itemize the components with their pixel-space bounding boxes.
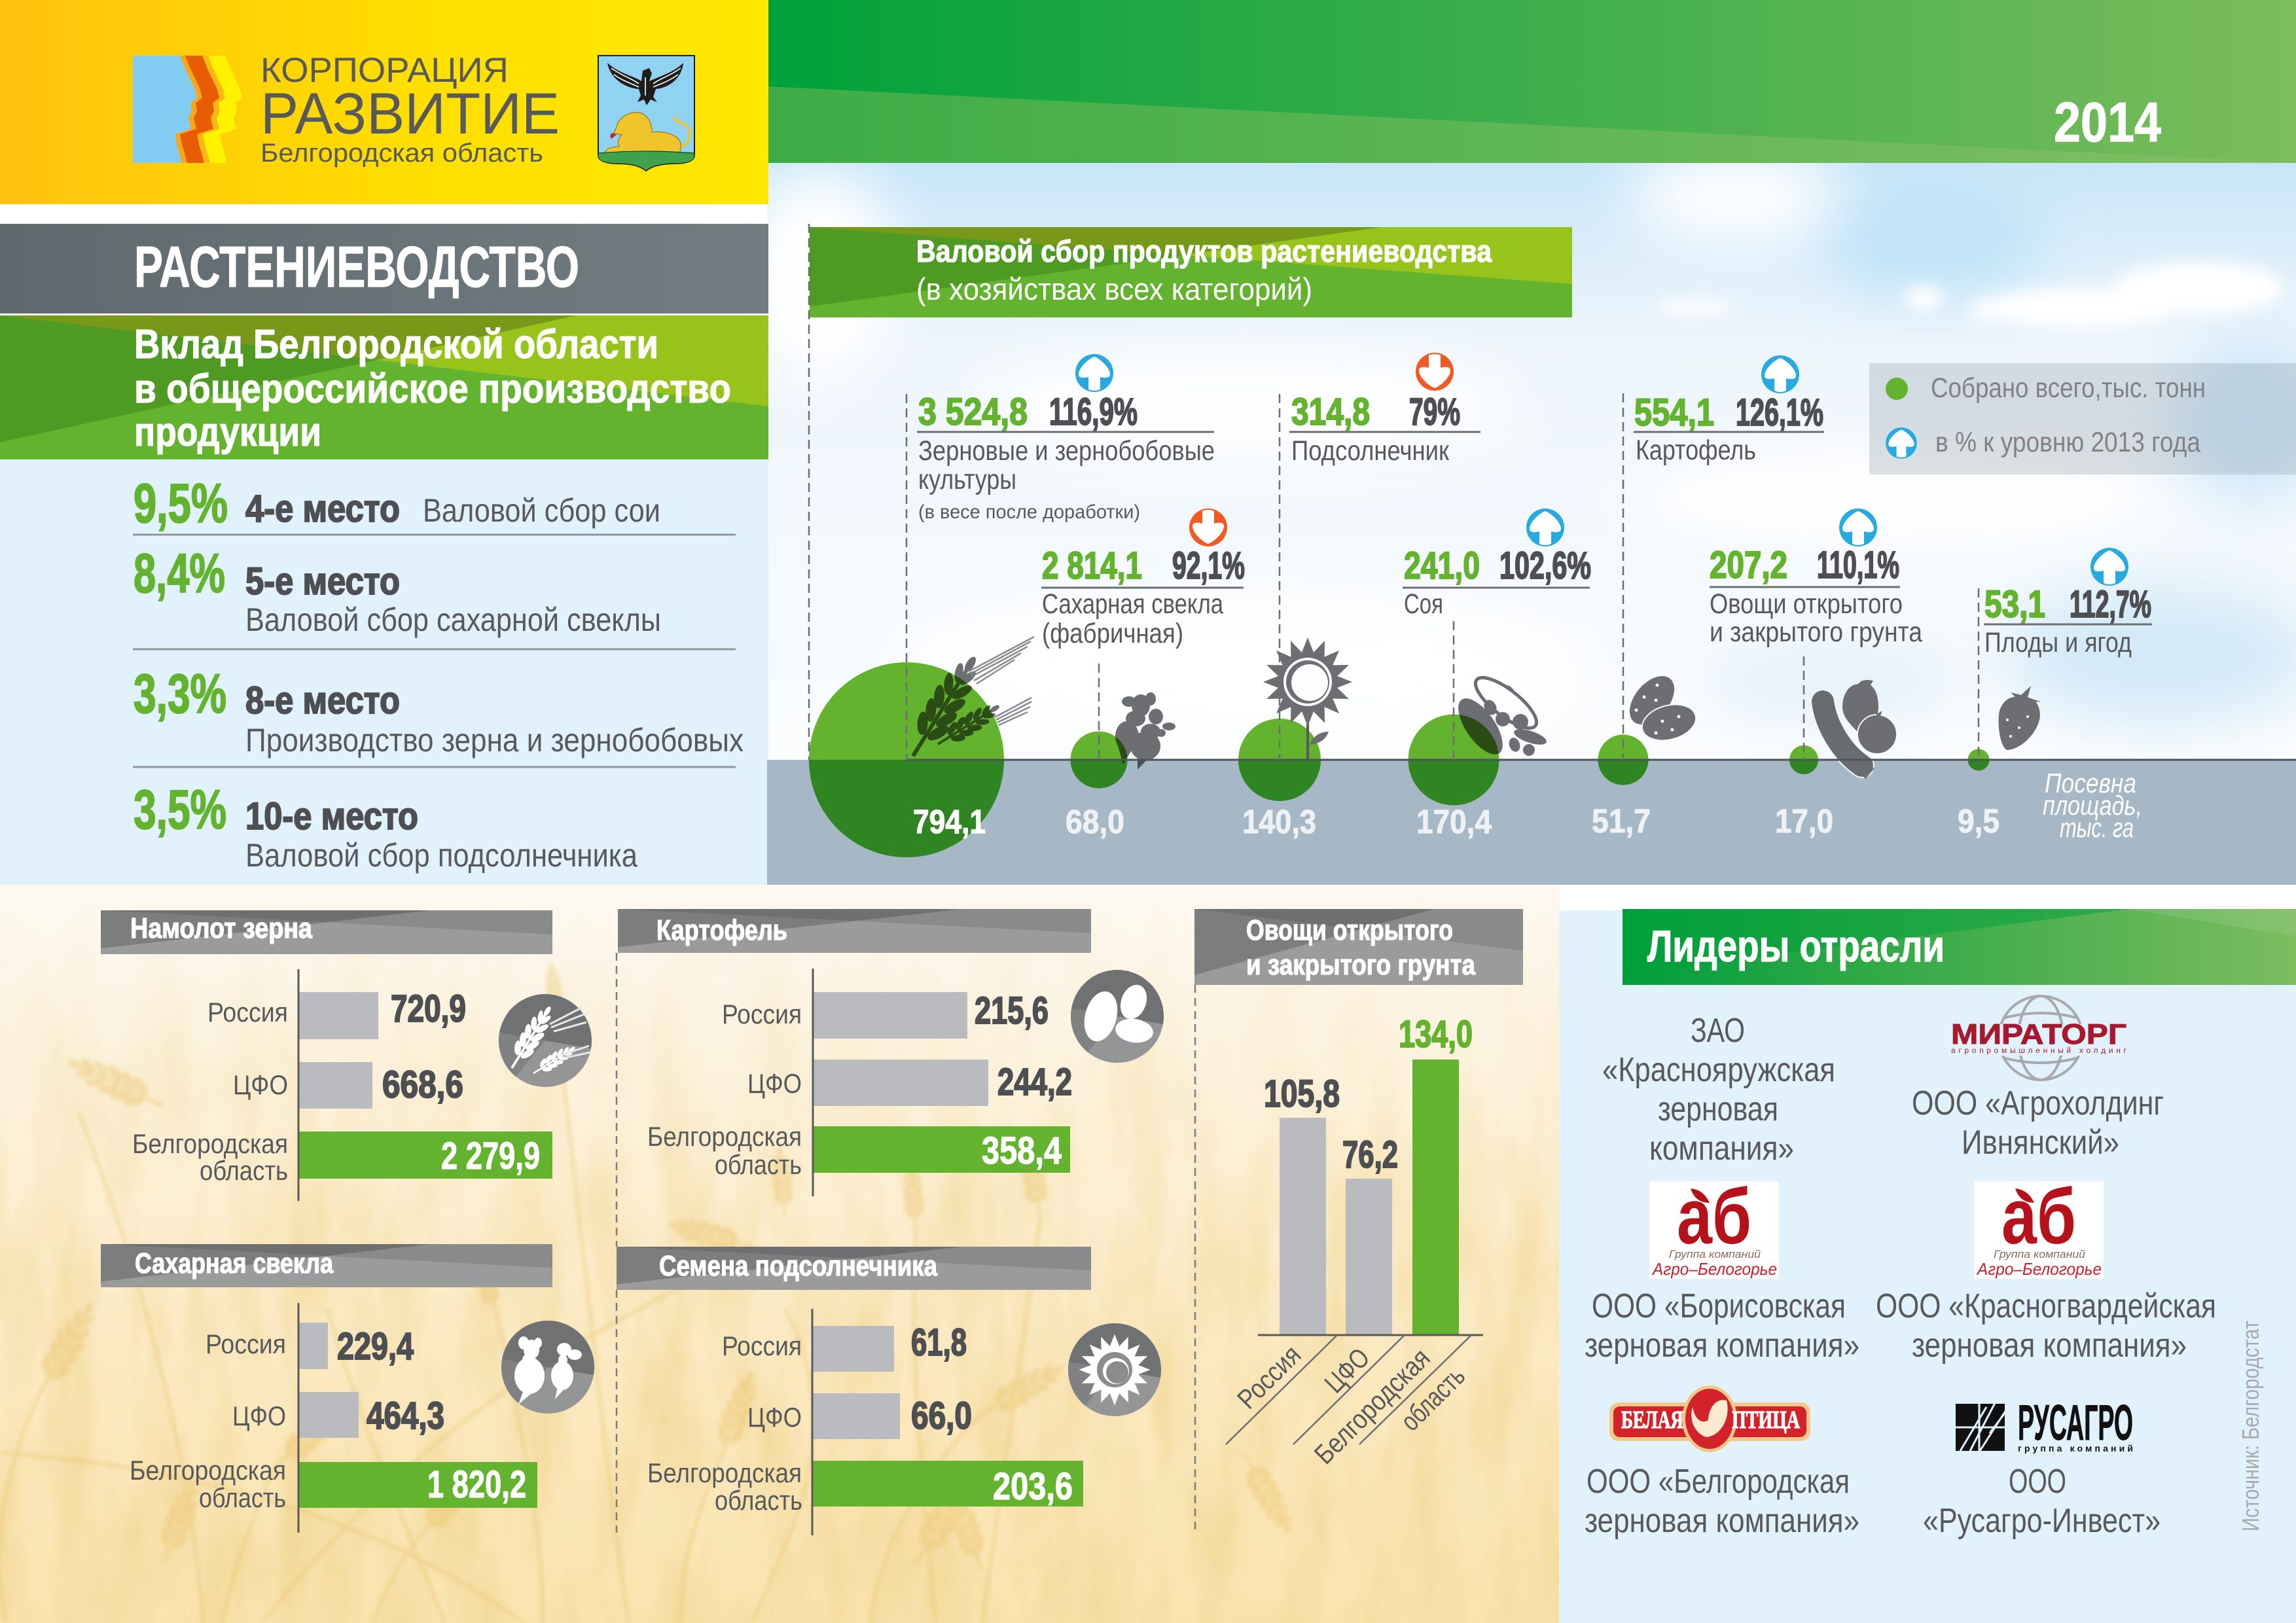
company: Rusagro-Invest: ООО xyxy=(2009,1463,2066,1501)
logo: Miratorg: МИРАТОРГ xyxy=(1951,1018,2126,1050)
bubbles: sown area xyxy=(809,662,1990,857)
values: 358,4 xyxy=(982,1130,1062,1172)
values: 1 820,2 xyxy=(427,1463,526,1506)
data: grain xyxy=(917,354,1215,523)
sown area values: 140,3 xyxy=(1242,803,1316,840)
chart: grain threshing xyxy=(101,910,592,1201)
bars xyxy=(813,969,1070,1196)
data: sunflower: 79% xyxy=(1409,391,1460,433)
heading text: продукции xyxy=(134,410,321,455)
rank: sugar beet xyxy=(134,543,661,638)
data: grain: Зерновые и зернобобовые xyxy=(918,435,1215,467)
labels xyxy=(647,1330,802,1516)
data: soy: 102,6% xyxy=(1499,544,1591,587)
bars xyxy=(1226,1060,1483,1444)
values xyxy=(382,988,540,1177)
labels: Россия xyxy=(722,1330,802,1361)
data: soy: Соя xyxy=(1404,588,1443,620)
labels: Россия xyxy=(206,1329,286,1359)
company: Krasnoyaruzhskaya: ЗАО xyxy=(1691,1012,1745,1050)
ground band xyxy=(767,760,2296,885)
legend: в % к уровню 2013 года xyxy=(1935,427,2200,458)
data: grain: (в весе после доработки) xyxy=(918,501,1140,523)
rank: sugar beet: 8,4% xyxy=(134,543,225,604)
values: 105,8 xyxy=(1264,1073,1340,1115)
values: 720,9 xyxy=(391,988,466,1030)
company: Ivnyansky xyxy=(1912,1084,2164,1162)
heading xyxy=(1623,909,2296,985)
chart: sunflower seeds xyxy=(617,1247,1161,1535)
rank: sunflower: 3,5% xyxy=(134,779,226,840)
data: sunflower xyxy=(1289,353,1480,467)
sown area values: 17,0 xyxy=(1775,802,1833,840)
values xyxy=(975,990,1072,1172)
sown area values: 170,4 xyxy=(1416,803,1492,840)
data: fruit and berries: 53,1 xyxy=(1984,583,2045,626)
labels: область xyxy=(715,1149,802,1180)
panel: gross harvest chart xyxy=(767,224,2296,885)
chart heading: Валовой сбор продуктов растениеводства xyxy=(916,234,1492,268)
bars xyxy=(298,969,552,1201)
rotated labels: Россия xyxy=(1231,1339,1307,1415)
company: Krasnoyaruzhskaya: «Краснояружская xyxy=(1602,1051,1835,1089)
icon: wheat circle xyxy=(499,994,592,1087)
chart: potato xyxy=(618,909,1164,1196)
rank: grain: 8-е место xyxy=(245,679,400,722)
chart: potato: Картофель xyxy=(656,914,787,946)
values xyxy=(1264,1013,1473,1176)
chart: sugar beet xyxy=(101,1244,594,1533)
labels: ЦФО xyxy=(747,1068,802,1099)
rank: soy xyxy=(134,473,660,534)
logo: Agro-Belogorye 2 xyxy=(1974,1173,2104,1279)
company: Borisovskaya xyxy=(1585,1287,1859,1364)
heading: Лидеры отрасли xyxy=(1647,921,1945,971)
values: 66,0 xyxy=(911,1395,972,1437)
data: grain: культуры xyxy=(918,464,1016,495)
logo: Agro-Belogorye 1 xyxy=(1649,1173,1779,1279)
bars xyxy=(812,1309,1083,1535)
logo: Miratorg xyxy=(1947,996,2132,1080)
rank: soy: 9,5% xyxy=(134,473,228,534)
labels: Россия xyxy=(722,999,802,1029)
heading: plant growing: РАСТЕНИЕВОДСТВО xyxy=(134,234,579,299)
rank: grain xyxy=(134,663,744,758)
logo: Belaya Ptitsa xyxy=(1609,1385,1810,1452)
icon: beet circle xyxy=(501,1321,594,1414)
data: potato: 126,1% xyxy=(1736,391,1823,434)
data: vegetables: 110,1% xyxy=(1817,544,1899,586)
data: fruit and berries: 112,7% xyxy=(2070,583,2151,626)
company: Krasnoyaruzhskaya xyxy=(1602,1012,1835,1168)
data: sugar beet: 92,1% xyxy=(1172,544,1245,587)
data: grain: 116,9% xyxy=(1049,391,1138,433)
company: Borisovskaya: ООО «Борисовская xyxy=(1592,1287,1846,1325)
values: 61,8 xyxy=(911,1321,967,1364)
values xyxy=(911,1321,1073,1508)
logo: Agro-Belogorye 2: Агро–Белогорье xyxy=(1976,1259,2102,1279)
logo: Belaya Ptitsa: ПТИЦА xyxy=(1732,1406,1800,1434)
company: Krasnoyaruzhskaya: зерновая xyxy=(1658,1090,1778,1128)
heading text: Вклад Белгородской области xyxy=(134,322,658,367)
data: sugar beet: 2 814,1 xyxy=(1042,544,1142,587)
panel: top green band xyxy=(768,0,2296,163)
data: fruit and berries: Плоды и ягод xyxy=(1984,627,2132,658)
background: wheat field xyxy=(0,885,1560,1623)
panel: section title xyxy=(0,224,768,313)
values xyxy=(337,1325,526,1506)
values: 215,6 xyxy=(975,990,1049,1032)
data: potato: Картофель xyxy=(1636,435,1756,466)
heading text: в общероссийское производство xyxy=(134,366,731,412)
background: sky xyxy=(740,151,2296,764)
panel: rankings list xyxy=(133,473,744,874)
chart: sunflower seeds: Семена подсолнечника xyxy=(659,1250,937,1282)
values: 2 279,9 xyxy=(441,1135,540,1177)
icon: potato xyxy=(1621,668,1700,746)
icon: sunflower xyxy=(1263,637,1352,760)
panel: industry leaders: РУСАГРО xyxy=(2018,1395,2133,1451)
chart: sugar beet: Сахарная свекла xyxy=(135,1247,333,1279)
data: potato xyxy=(1634,355,1824,466)
rotated labels: область xyxy=(1395,1361,1471,1436)
labels xyxy=(132,997,288,1186)
values: 203,6 xyxy=(993,1465,1073,1508)
data: vegetables xyxy=(1710,508,1922,648)
labels: область xyxy=(199,1482,286,1513)
logo: Miratorg: агропромышленный холдинг xyxy=(1951,1046,2127,1055)
data: sugar beet xyxy=(1041,508,1245,649)
sown area values: 9,5 xyxy=(1958,802,2000,840)
company: Krasnogvardeyskaya: зерновая компания» xyxy=(1912,1327,2187,1364)
sown area values: 51,7 xyxy=(1592,802,1651,840)
labels: Белгородская xyxy=(130,1455,286,1486)
sown area caption: площадь, xyxy=(2043,790,2142,821)
data: vegetables: Овощи открытого xyxy=(1710,588,1903,620)
data: fruit and berries xyxy=(1984,548,2152,658)
company: Belgorodskaya xyxy=(1585,1463,1859,1540)
sown area values: 68,0 xyxy=(1066,803,1124,840)
data: soy: 241,0 xyxy=(1404,544,1480,587)
rank: sunflower xyxy=(134,779,637,874)
chart: vegetables: Овощи открытого xyxy=(1246,914,1453,946)
chart: vegetables xyxy=(1194,909,1523,1470)
values: 229,4 xyxy=(337,1325,414,1368)
rotated labels: ЦФО xyxy=(1318,1342,1375,1399)
panel: logo header xyxy=(0,0,768,204)
data: vegetables: 207,2 xyxy=(1710,544,1787,586)
company: Rusagro-Invest xyxy=(1923,1463,2161,1540)
chart heading xyxy=(810,227,1572,317)
legend: Собрано всего,тыс. тонн xyxy=(1931,372,2206,404)
logo: Belaya Ptitsa: БЕЛАЯ xyxy=(1621,1406,1683,1434)
chart: grain threshing: Намолот зерна xyxy=(130,912,312,944)
logo: Agro-Belogorye 1: Агро–Белогорье xyxy=(1651,1259,1777,1279)
icon: coat of arms xyxy=(598,56,694,171)
labels: область xyxy=(715,1485,802,1516)
sown area caption: Посевна xyxy=(2045,768,2136,798)
sown area caption: тыс. га xyxy=(2060,812,2134,843)
legend xyxy=(1869,363,2296,474)
rank: grain: 3,3% xyxy=(134,663,226,724)
logo: Agro-Belogorye 1: аб xyxy=(1677,1173,1751,1260)
company: Krasnogvardeyskaya: ООО «Красногвардейская xyxy=(1876,1287,2216,1325)
values: 134,0 xyxy=(1399,1013,1473,1056)
rank: sugar beet: Валовой сбор сахарной свеклы xyxy=(245,601,661,638)
values: 464,3 xyxy=(367,1395,444,1437)
labels: область xyxy=(200,1155,288,1186)
rank: sunflower: Валовой сбор подсолнечника xyxy=(245,837,637,874)
logo: Agro-Belogorye 1: Группа компаний xyxy=(1669,1248,1761,1260)
data: grain: 3 524,8 xyxy=(918,391,1028,433)
logo: Rusagro xyxy=(1956,1395,2133,1454)
rank: sugar beet: 5-е место xyxy=(245,560,400,603)
logo: Agro-Belogorye 2: аб xyxy=(2001,1173,2076,1260)
rotated labels: Белгородская xyxy=(1308,1342,1436,1470)
data: vegetables: и закрытого грунта xyxy=(1710,616,1922,648)
company: Rusagro-Invest: «Русагро-Инвест» xyxy=(1923,1502,2161,1540)
logo: Agro-Belogorye 2: Группа компаний xyxy=(1994,1248,2086,1260)
data: sugar beet: (фабричная) xyxy=(1042,618,1183,649)
company: Krasnoyaruzhskaya: компания» xyxy=(1649,1130,1794,1168)
background: light blue left panel xyxy=(0,458,768,885)
company: Borisovskaya: зерновая компания» xyxy=(1585,1327,1859,1364)
dashed separators xyxy=(617,953,1195,1533)
values: 668,6 xyxy=(382,1063,463,1106)
logo text: КОРПОРАЦИЯ xyxy=(260,51,509,90)
values: 244,2 xyxy=(997,1061,1072,1103)
data: sugar beet: Сахарная свекла xyxy=(1042,588,1223,620)
labels: ЦФО xyxy=(747,1402,802,1433)
company: Belgorodskaya: зерновая компания» xyxy=(1585,1502,1859,1540)
company: Krasnogvardeyskaya xyxy=(1876,1287,2216,1364)
icon: corporation logo faces xyxy=(133,56,242,163)
rank: soy: Валовой сбор сои xyxy=(423,492,660,529)
labels: ЦФО xyxy=(233,1069,288,1100)
icon: potato circle xyxy=(1071,970,1164,1063)
labels: Россия xyxy=(207,997,288,1027)
rank: grain: Производство зерна и зернобобовых xyxy=(245,722,744,758)
icon: strawberry xyxy=(1999,686,2041,750)
values: 76,2 xyxy=(1342,1133,1398,1176)
logo text: Белгородская область xyxy=(260,139,543,168)
labels xyxy=(647,999,802,1180)
panel: contribution heading xyxy=(0,315,768,459)
source note: Источник: Белгородстат xyxy=(2237,1321,2264,1531)
company: Ivnyansky: ООО «Агрохолдинг xyxy=(1912,1084,2164,1122)
data: soy xyxy=(1403,508,1591,620)
sown area caption xyxy=(2043,768,2142,843)
chart heading: (в хозяйствах всех категорий) xyxy=(916,272,1312,306)
chart: vegetables: и закрытого грунта xyxy=(1246,949,1475,981)
heading text xyxy=(134,322,731,455)
rank: sunflower: 10-е место xyxy=(245,795,418,838)
sown area values: 794,1 xyxy=(913,803,986,840)
data: sunflower: 314,8 xyxy=(1291,391,1370,433)
year: 2014 xyxy=(2054,92,2161,154)
labels: ЦФО xyxy=(232,1400,286,1431)
logo text: РАЗВИТИЕ xyxy=(260,80,560,146)
labels: Белгородская xyxy=(132,1128,288,1159)
data: sunflower: Подсолнечник xyxy=(1291,435,1450,467)
logo: Rusagro: группа компаний xyxy=(2018,1443,2133,1454)
icon: soy xyxy=(1450,669,1549,762)
rank: soy: 4-е место xyxy=(245,488,400,530)
icon: sunflower circle xyxy=(1068,1323,1161,1416)
panel: industry leaders xyxy=(1559,909,2296,1623)
icon: wheat xyxy=(897,637,1034,766)
labels: Белгородская xyxy=(647,1121,802,1152)
company: Belgorodskaya: ООО «Белгородская xyxy=(1587,1463,1850,1501)
labels xyxy=(130,1329,286,1513)
baseline xyxy=(907,759,2296,760)
rotated labels xyxy=(1231,1339,1471,1470)
icon: vegetables xyxy=(1823,680,1897,779)
logo text xyxy=(260,51,560,168)
sown area values xyxy=(913,802,2000,840)
bars xyxy=(298,1303,537,1533)
icon: sugar beet xyxy=(1115,692,1175,770)
company: Ivnyansky: Ивнянский» xyxy=(1962,1124,2119,1162)
data: potato: 554,1 xyxy=(1634,391,1714,434)
labels: Белгородская xyxy=(647,1457,802,1488)
